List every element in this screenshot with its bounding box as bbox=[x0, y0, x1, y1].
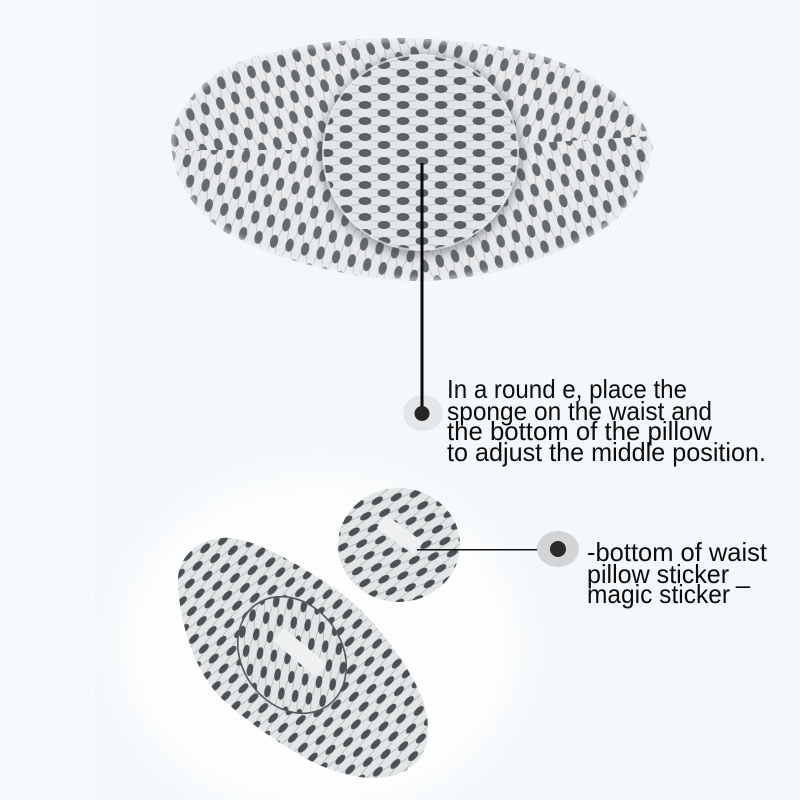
top pillow: front view with round sponge bbox=[171, 38, 653, 281]
callout text: magic sticker: pillow sticker _ bbox=[587, 559, 751, 589]
callout text: magic sticker: magic sticker bbox=[587, 579, 730, 609]
callout text: magic sticker: -bottom of waist bbox=[587, 537, 768, 567]
callout marker: round sponge bbox=[403, 163, 443, 431]
inner recess with velcro strip bbox=[215, 576, 369, 734]
pillow body bbox=[178, 538, 428, 778]
callout text: round sponge placement bbox=[447, 374, 766, 467]
pillow body mesh bbox=[171, 38, 653, 281]
callout text: round sponge placement: In a round e, place the bbox=[447, 374, 687, 404]
callout text: round sponge placement: the bottom of the pillow bbox=[447, 416, 712, 446]
bottom pillow: back view bbox=[178, 538, 428, 778]
small round sponge underside with velcro strip bbox=[338, 488, 460, 602]
callout text: round sponge placement: to adjust the middle position. bbox=[447, 437, 766, 467]
infographic canvas bbox=[142, 38, 767, 793]
callout text: magic sticker bbox=[587, 537, 768, 609]
callout marker: magic sticker bbox=[417, 531, 579, 567]
round sponge disc bbox=[322, 54, 518, 250]
callout text: round sponge placement: sponge on the waist and bbox=[447, 396, 712, 426]
